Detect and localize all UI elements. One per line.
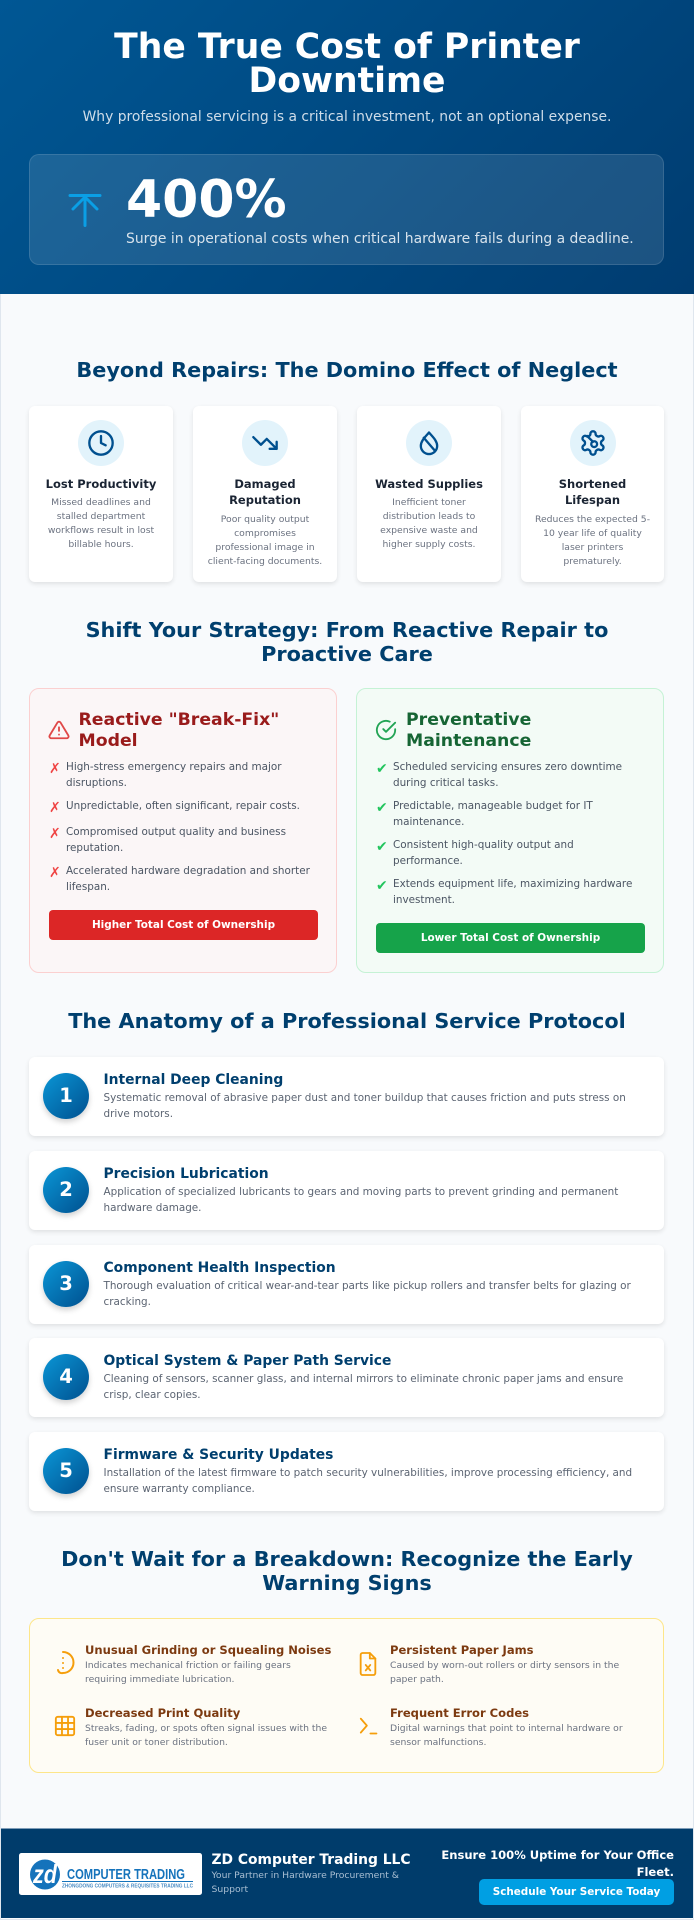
step text: Installation of the latest firmware to patch security vulnerabilities, improve processing efficiency, and (104, 1467, 632, 1479)
step 3 (29, 1245, 664, 1324)
card text: Poor quality output (221, 514, 309, 525)
card text: prematurely. (563, 556, 622, 567)
text: paper path. (390, 1674, 444, 1684)
item 1: ✗ (49, 761, 61, 777)
company tagline (212, 1868, 399, 1896)
item 1 (376, 761, 622, 789)
card title: Reputation (229, 493, 301, 507)
card text: Reduces the expected 5- (535, 514, 650, 525)
step number (43, 1073, 89, 1119)
company tagline: Support (212, 1884, 248, 1894)
stat callout (29, 154, 664, 265)
item 4 (376, 878, 632, 906)
panel: warning signs (29, 1618, 664, 1773)
card title (229, 477, 301, 507)
warning sign: error codes (360, 1706, 623, 1748)
card text: client-facing documents. (208, 556, 322, 567)
card text: workflows result in lost (48, 525, 154, 536)
item 3: performance. (393, 855, 463, 867)
card text: expensive waste and (380, 525, 478, 536)
banner: higher cost: Higher Total Cost of Ownership (92, 919, 275, 931)
heading: service protocol: The Anatomy of a Professional Service Protocol (68, 1009, 626, 1033)
card text: 10 year life of quality (543, 528, 642, 539)
header banner (0, 0, 694, 294)
step number: 5 (59, 1459, 73, 1482)
card text: stalled department (57, 511, 145, 522)
title: Frequent Error Codes (390, 1706, 529, 1720)
banner: lower cost: Lower Total Cost of Ownership (421, 932, 600, 944)
banner: higher cost (49, 910, 318, 940)
item 4: ✗ (49, 865, 61, 881)
footer (1, 1828, 693, 1918)
text: Streaks, fading, or spots often signal issues with the (85, 1722, 327, 1734)
card text (48, 497, 154, 550)
item 2: maintenance. (393, 816, 464, 828)
warning sign: print quality (54, 1706, 327, 1748)
text (85, 1660, 291, 1684)
step number (43, 1354, 89, 1400)
heading: shift your strategy: Proactive Care (261, 642, 433, 666)
text (390, 1722, 623, 1750)
panel title: Model (78, 731, 138, 751)
company name: ZD Computer Trading LLC (212, 1852, 410, 1868)
call to action: Fleet. (637, 1864, 674, 1878)
step 5 (29, 1432, 664, 1511)
icon: file x (360, 1652, 376, 1676)
card title: Shortened (559, 477, 626, 491)
card text: compromises (234, 528, 296, 539)
item 1: High-stress emergency repairs and major (66, 761, 282, 773)
item 2: Predictable, manageable budget for IT (393, 800, 593, 812)
icon: clock (78, 420, 124, 466)
panel title (78, 710, 279, 751)
step text: Systematic removal of abrasive paper dust and toner buildup that causes friction and puts stress on (104, 1092, 626, 1104)
text (85, 1722, 327, 1748)
item 4: lifespan. (66, 881, 110, 893)
call to action: Ensure 100% Uptime for Your Office (441, 1848, 674, 1862)
item 2: ✗ (49, 800, 61, 816)
call to action (441, 1847, 674, 1880)
icon: warning triangle (48, 720, 70, 740)
item 2 (376, 800, 593, 828)
button: schedule service (479, 1879, 674, 1905)
step title: Firmware & Security Updates (104, 1447, 333, 1463)
icon: gear with wrench (570, 420, 616, 466)
step text (104, 1186, 618, 1214)
item 1: disruptions. (66, 777, 127, 789)
item 4 (49, 865, 310, 893)
card text (208, 514, 322, 567)
card title: Wasted Supplies (375, 477, 483, 491)
step text (104, 1467, 632, 1495)
button: schedule service: Schedule Your Service Today (493, 1886, 660, 1898)
step title: Precision Lubrication (104, 1166, 269, 1182)
warning sign: noises (57, 1643, 331, 1684)
title: The True Cost of Printer (114, 26, 580, 66)
step number (43, 1261, 89, 1307)
card title: Lifespan (565, 493, 620, 507)
panel title: Preventative (406, 710, 531, 730)
item 2 (49, 800, 300, 816)
item 4: investment. (393, 894, 455, 906)
step text: Application of specialized lubricants to gears and moving parts to prevent grinding and permanent (104, 1186, 618, 1198)
card text: Missed deadlines and (51, 497, 151, 508)
card: wasted supplies (357, 406, 501, 582)
step text: cracking. (104, 1296, 151, 1308)
card text: higher supply costs. (383, 539, 475, 550)
card text: billable hours. (68, 539, 134, 550)
item 3: ✔ (376, 839, 388, 855)
title: Unusual Grinding or Squealing Noises (85, 1643, 331, 1657)
heading: shift your strategy (86, 618, 608, 666)
card text: Inefficient toner (392, 497, 466, 508)
step number (43, 1448, 89, 1494)
step title: Optical System & Paper Path Service (104, 1353, 391, 1369)
step text: Cleaning of sensors, scanner glass, and internal mirrors to eliminate chronic paper jams and ensure (104, 1373, 623, 1385)
step text: Thorough evaluation of critical wear-and-tear parts like pickup rollers and transfer belts for glazing or (104, 1280, 631, 1292)
item 3: Consistent high-quality output and (393, 839, 574, 851)
step number: 4 (59, 1365, 73, 1388)
item 1: during critical tasks. (393, 777, 499, 789)
step number (43, 1167, 89, 1213)
item 3: ✗ (49, 826, 61, 842)
text: fuser unit or toner distribution. (85, 1736, 228, 1748)
banner: lower cost (376, 923, 645, 953)
step number: 1 (59, 1084, 73, 1107)
icon: droplet off (406, 420, 452, 466)
icon: ear (57, 1651, 74, 1674)
list of benefits (376, 761, 632, 906)
card title: Lost Productivity (46, 477, 156, 491)
icon: terminal (360, 1718, 378, 1734)
title: Decreased Print Quality (85, 1706, 240, 1720)
step number: 3 (59, 1272, 73, 1295)
text: Caused by worn-out rollers or dirty sensors in the (390, 1660, 619, 1670)
item 3 (376, 839, 574, 867)
warning sign: paper jams (360, 1643, 619, 1684)
title (114, 26, 580, 101)
stat description: Surge in operational costs when critical hardware fails during a deadline. (126, 231, 634, 247)
heading: warning signs: Warning Signs (262, 1570, 432, 1594)
step text: hardware damage. (104, 1202, 202, 1214)
card title (559, 477, 626, 507)
title: Downtime (249, 61, 445, 101)
icon: arrow up (68, 194, 102, 227)
card text (535, 514, 650, 567)
panel title: Reactive "Break-Fix" (78, 710, 279, 730)
step text (103, 1280, 631, 1308)
card: damaged reputation (193, 406, 337, 582)
text: Digital warnings that point to internal hardware or (390, 1722, 623, 1734)
card: shortened lifespan (521, 406, 664, 582)
item 3: reputation. (66, 842, 123, 854)
step 4 (29, 1338, 664, 1417)
item 2: Unpredictable, often significant, repair costs. (66, 800, 300, 812)
icon: trending down (242, 420, 288, 466)
icon: check circle (376, 720, 396, 740)
card text: laser printers (562, 542, 623, 553)
subtitle: Why professional servicing is a critical investment, not an optional expense. (83, 109, 611, 125)
step text: ensure warranty compliance. (104, 1483, 255, 1495)
item 4: Accelerated hardware degradation and shorter (66, 865, 310, 877)
step 2 (29, 1151, 664, 1230)
item 1: ✔ (376, 761, 388, 777)
heading: warning signs (61, 1547, 633, 1594)
step title: Internal Deep Cleaning (104, 1072, 283, 1088)
panel title (406, 710, 531, 751)
item 4: ✔ (376, 878, 388, 894)
card: lost productivity (29, 406, 173, 582)
step number: 2 (59, 1178, 73, 1201)
text (390, 1660, 619, 1684)
text: Indicates mechanical friction or failing gears (85, 1660, 291, 1670)
item 3 (49, 826, 286, 854)
heading: shift your strategy: Shift Your Strategy: From Reactive Repair to (86, 618, 608, 642)
step text: drive motors. (104, 1108, 173, 1120)
step text (104, 1092, 626, 1120)
stat number: 400% (126, 170, 287, 230)
text: requiring immediate lubrication. (85, 1674, 234, 1684)
panel: preventative maintenance (356, 688, 664, 973)
item 4: Extends equipment life, maximizing hardware (393, 878, 632, 890)
heading: domino effect: Beyond Repairs: The Domino Effect of Neglect (76, 358, 618, 382)
panel title: Maintenance (406, 731, 531, 751)
item 3: Compromised output quality and business (66, 826, 286, 838)
logo: zd (32, 1859, 58, 1889)
step title: Component Health Inspection (104, 1260, 336, 1276)
list of drawbacks (49, 761, 310, 893)
item 2: ✔ (376, 800, 388, 816)
icon: grid (54, 1716, 76, 1736)
title: Persistent Paper Jams (390, 1643, 534, 1657)
logo (19, 1853, 202, 1895)
item 1 (49, 761, 282, 789)
step text (104, 1373, 623, 1401)
step 1 (29, 1057, 664, 1136)
text: sensor malfunctions. (390, 1736, 486, 1748)
company tagline: Your Partner in Hardware Procurement & (212, 1870, 399, 1880)
heading: warning signs: Don't Wait for a Breakdown: Recognize the Early (61, 1547, 633, 1571)
card text (380, 497, 478, 550)
step text: crisp, clear copies. (104, 1389, 201, 1401)
logo: ZHONGDONG COMPUTERS & REQUISITES TRADING LLC (62, 1884, 193, 1890)
item 1: Scheduled servicing ensures zero downtime (393, 761, 622, 773)
card title: Damaged (234, 477, 296, 491)
card text: professional image in (215, 542, 315, 553)
card text: distribution leads to (383, 511, 475, 522)
panel: reactive model (29, 688, 337, 973)
